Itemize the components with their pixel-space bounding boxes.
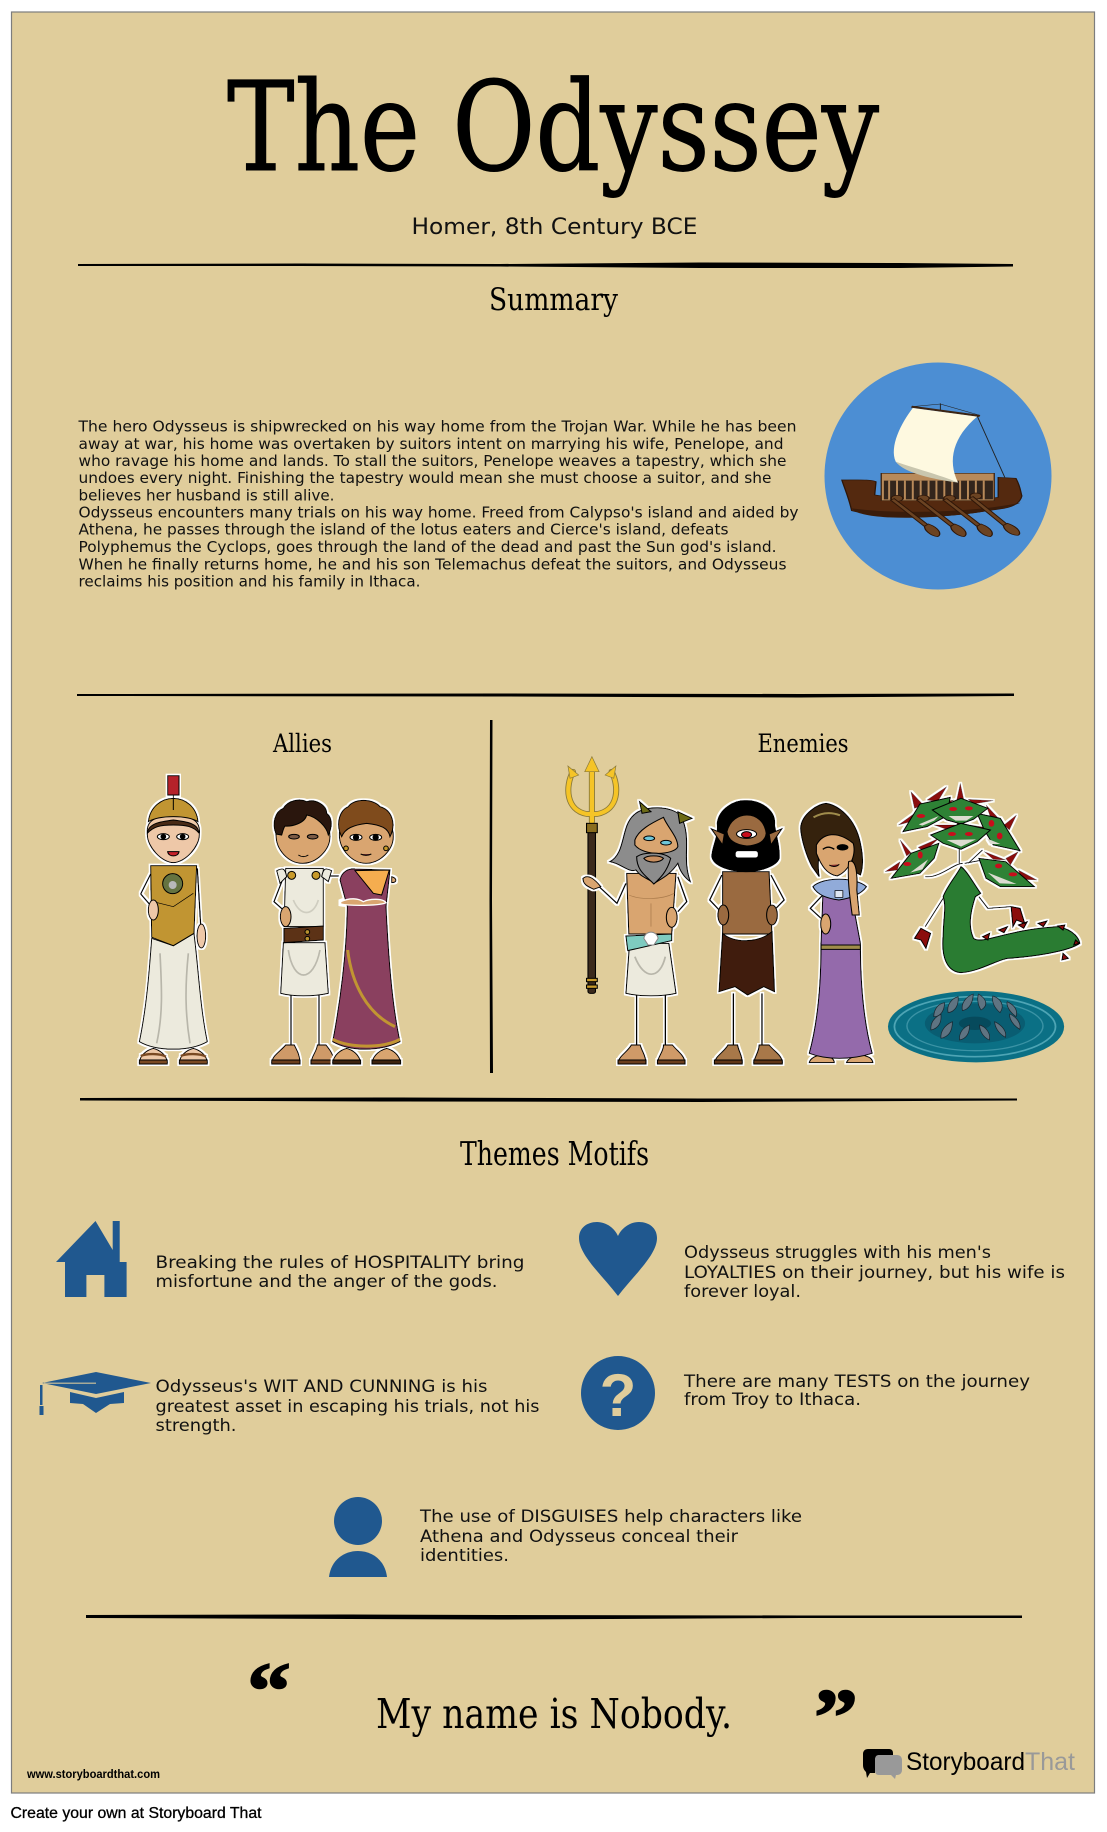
illustration: Charybdis whirlpool (888, 991, 1064, 1062)
illustration: trident (568, 757, 616, 993)
character: Circe (801, 803, 873, 1063)
summary text: undoes every night. Finishing the tapestry would mean she must choose a suitor, and she (78, 469, 772, 487)
icon: house (56, 1221, 136, 1297)
website url: www.storyboardthat.com (26, 1769, 160, 1781)
summary text: When he finally returns home, he and his son Telemachus defeat the suitors, and Odysseus (78, 556, 786, 574)
theme: loyalty: forever loyal. (684, 1282, 801, 1301)
icon: heart (579, 1222, 657, 1296)
quote mark: closing: ” (814, 1674, 858, 1762)
footer text: Create your own at Storyboard That (10, 1805, 262, 1822)
icon: person (329, 1497, 387, 1577)
icon: graduation cap (40, 1372, 151, 1415)
theme: disguises: Athena and Odysseus conceal their (420, 1527, 738, 1546)
logo: Storyboard That: Storyboard (906, 1748, 1025, 1776)
heading: themes motifs: Themes Motifs (460, 1134, 649, 1173)
theme: wit and cunning: strength. (156, 1416, 236, 1435)
theme: loyalty: LOYALTIES on their journey, but his wife is (684, 1263, 1065, 1282)
character: Athena (139, 776, 207, 1064)
character: Penelope (333, 800, 401, 1064)
illustration: Scylla monster (885, 783, 1080, 973)
theme: hospitality: Breaking the rules of HOSPITALITY bring (156, 1253, 524, 1272)
summary text: Odysseus encounters many trials on his way home. Freed from Calypso's island and aided by (78, 504, 798, 522)
logo: Storyboard That: That (1025, 1748, 1075, 1776)
theme: tests: There are many TESTS on the journey (683, 1372, 1030, 1391)
subtitle: Homer, 8th Century BCE (412, 215, 698, 240)
heading: summary: Summary (489, 282, 618, 318)
icon: question mark (581, 1356, 655, 1430)
character: Cyclops (710, 801, 784, 1064)
theme: disguises: The use of DISGUISES help characters like (419, 1507, 802, 1526)
theme: hospitality (56, 1221, 524, 1297)
summary text: The hero Odysseus is shipwrecked on his way home from the Trojan War. While he has been (77, 418, 797, 436)
title: The Odyssey (227, 56, 879, 200)
theme: hospitality: misfortune and the anger of the gods. (156, 1272, 498, 1291)
theme: tests: from Troy to Ithaca. (684, 1390, 861, 1409)
summary text: Athena, he passes through the island of the lotus eaters and Cierce's island, defeats (78, 520, 728, 538)
theme: loyalty: Odysseus struggles with his men's (684, 1243, 991, 1262)
allies illustrations (139, 776, 401, 1064)
summary text: believes her husband is still alive. (78, 486, 334, 504)
theme: disguises: identities. (420, 1546, 509, 1565)
summary text: who ravage his home and lands. To stall the suitors, Penelope weaves a tapestry, which she (78, 452, 786, 470)
summary text: Polyphemus the Cyclops, goes through the land of the dead and past the Sun god's island. (78, 538, 776, 556)
theme: loyalty (579, 1222, 1065, 1301)
summary text: away at war, his home was overtaken by suitors intent on marrying his wife, Penelope, and (78, 435, 784, 453)
theme: wit and cunning: greatest asset in escaping his trials, not his (156, 1397, 540, 1416)
heading: allies: Allies (272, 729, 332, 758)
heading: enemies: Enemies (758, 729, 848, 758)
quote mark: opening: “ (247, 1648, 291, 1736)
summary text (77, 418, 799, 590)
icon: question mark: ? (600, 1362, 636, 1429)
enemies illustrations (568, 757, 1080, 1064)
theme: disguises (329, 1497, 802, 1577)
icon: ship in blue circle (824, 362, 1052, 590)
quote text: My name is Nobody. (376, 1690, 732, 1738)
character: Poseidon (583, 802, 692, 1064)
summary text: reclaims his position and his family in Ithaca. (78, 572, 420, 590)
character: Odysseus (272, 800, 343, 1064)
theme: wit and cunning (40, 1372, 540, 1435)
theme: tests (581, 1356, 1030, 1430)
logo: Storyboard That (863, 1748, 1075, 1779)
theme: wit and cunning: Odysseus's WIT AND CUNNING is his (156, 1377, 488, 1396)
